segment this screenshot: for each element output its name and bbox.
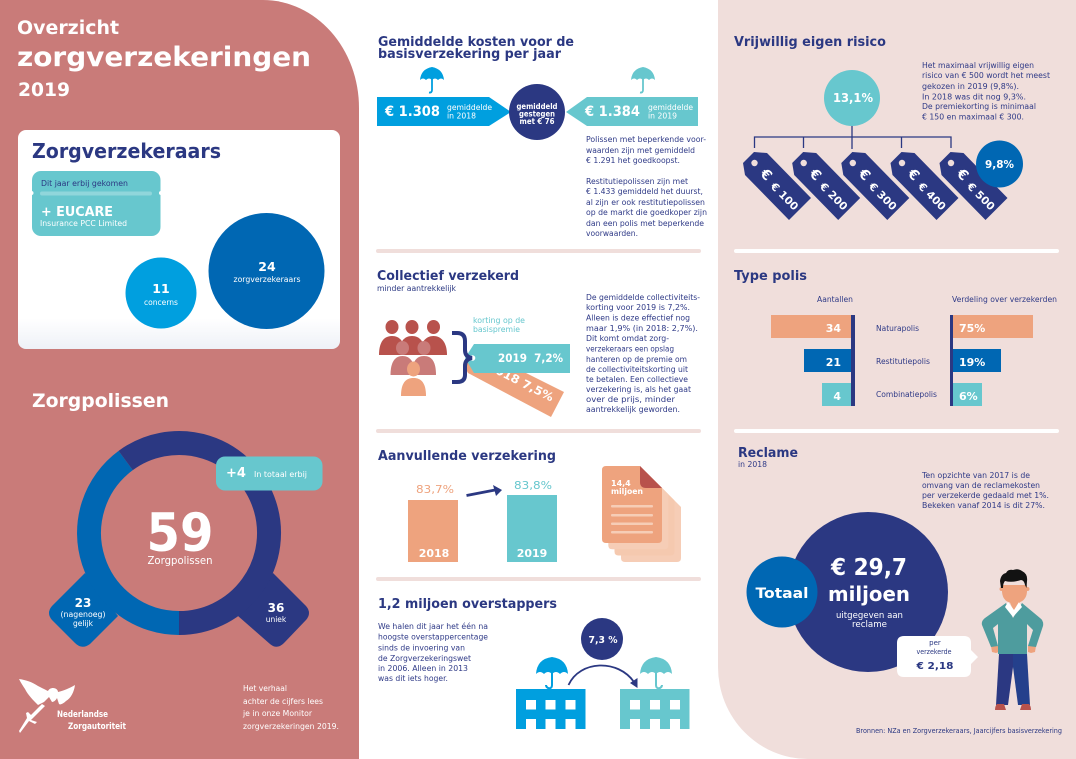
text: eigen risico: Het maximaal vrijwillig eigen [922,61,1034,70]
heading: gemiddelde kosten: Gemiddelde kosten voor de [378,35,574,50]
circle: gestegen met 76: met € 76 [520,117,554,126]
ring labels: uniek [266,615,287,624]
text: polissen: op de markt die goedkoper zijn [586,208,707,217]
panel: zorgverzekeraars [18,130,340,349]
heading: reclame [738,446,798,469]
tag: 400: € 400 [915,180,948,213]
text: collectiviteitskorting: aantrekkelijk geworden. [586,405,680,414]
arrow: 2018: gemiddelde [447,103,492,112]
bar: 2019: 2019 [517,547,547,560]
text: reclame: per verzekerde gedaald met 1%. [922,491,1049,500]
text: eigen risico: gekozen in 2019 (9,8%). [922,82,1019,91]
icon: documents 14,4 miljoen: miljoen [611,487,643,496]
text: overstappers: We halen dit jaar het één na [378,622,488,631]
column header: aantallen: Aantallen [817,295,853,304]
text: eigen risico: De premiekorting is minimaal [922,102,1036,111]
callout: per verzekerde: per [929,639,941,647]
tag: 300: € 300 [865,180,899,213]
title: Overzicht [17,18,119,39]
ring labels [60,596,287,628]
callout: +4 in totaal erbij: In totaal erbij [254,470,307,479]
arrow: 2018: in 2018 [447,112,476,120]
heading: collectief verzekerd: minder aantrekkelijk [377,284,456,293]
label: korting op de basispremie [473,316,525,334]
chart: verdeling bars: 75% [959,322,985,335]
text: monitor note: je in onze Monitor [242,709,313,718]
heading: collectief verzekerd [377,269,519,293]
tag: 200: € [805,165,824,184]
chart: aantallen bars: 34 [826,322,841,335]
icon: umbrella left [536,657,568,688]
tag: 300 [841,152,909,220]
callout: +4 in totaal erbij [216,456,322,490]
circle: 7,3% [581,618,623,660]
text: eigen risico: risico van € 500 wordt het meest [922,71,1050,80]
tag: 500: € [953,165,971,184]
tag: 2019 7,2% [465,344,570,373]
heading: vrijwillig eigen risico: Vrijwillig eigen risico [734,35,886,50]
logo: Nederlandse Zorgautoriteit [19,679,126,733]
title: 2019 [18,80,70,101]
circle: 29,7 miljoen: reclame [852,620,887,630]
text: polissen: Restitutiepolissen zijn met [586,177,688,186]
icon: group of people [379,320,447,396]
callout: per verzekerde: € 2,18 [915,661,954,672]
heading: reclame: Reclame [738,446,798,461]
text: collectiviteitskorting: maar 1,9% (in 2018: 2,7%). [586,324,698,333]
ticket: new insurer: + EUCARE [41,205,113,220]
circle: totaal [746,556,818,628]
callout: per verzekerde: verzekerde [916,648,952,656]
title: zorgverzekeringen [17,42,311,73]
icon: umbrella 2019 [631,67,655,93]
bar: 2018: 2018 [419,547,449,560]
section: type polis [734,269,1057,406]
text: eigen risico: € 150 en maximaal € 300. [922,112,1024,122]
bar: 2019: 83,8% [514,479,552,492]
text: overstappers [378,622,488,683]
panel: left background [0,0,359,759]
circle: totaal: Totaal [756,586,808,602]
text: polissen: al zijn er ook restitutiepolissen [586,198,705,207]
connector tree [754,126,951,149]
chart: verdeling bars: 6% [959,390,978,403]
text: collectiviteitskorting: over de prijs, minder [586,395,676,404]
chart: verdeling bars [950,315,1033,406]
tag: 2019 7,2%: 2019 7,2% [498,351,563,365]
circle: 7,3%: 7,3 % [588,635,618,646]
arrow: 2019 [566,97,698,126]
ring labels: 23 [75,596,91,610]
icon: person [982,569,1043,710]
arrow: switch insurer [568,665,638,688]
chart: aantallen bars: 21 [826,356,841,369]
section: overstappers [378,597,690,729]
text: polissen: dan een polis met beperkende [586,219,704,228]
ring labels: 36 [268,601,284,615]
arrow: increase [466,485,502,496]
circle: gestegen met 76: gemiddeld [516,102,558,111]
total: 59: 59 [146,503,214,564]
tag: 200 [792,152,860,220]
section: aanvullende verzekering [378,449,681,562]
tag: 2018 7,5% [463,355,564,417]
panel: right background [718,0,1076,759]
text: collectiviteitskorting: Dit komt omdat zorg- [586,334,669,343]
tag: 2018 7,5%: 2018 7,5% [486,359,557,405]
text: polissen: € 1.433 gemiddeld het duurst, [586,187,703,196]
text: polissen: voorwaarden. [586,229,638,238]
text: collectiviteitskorting: verzekeraars een opslag [586,344,674,354]
heading: reclame: in 2018 [738,460,767,469]
tag: 400 [890,152,958,220]
text: overstappers: was dit iets hoger. [378,674,448,683]
text: collectiviteitskorting: de collectiviteitskorting uit [586,365,688,374]
text: polissen [586,135,707,238]
tag: 100: € [756,165,775,184]
circle: gestegen met 76: gestegen [519,110,555,118]
heading: aanvullende verzekering: Aanvullende verzekering [378,449,556,464]
text: reclame: Ten opzichte van 2017 is de [921,471,1030,480]
ticket: new insurer: Insurance PCC Limited [40,219,127,228]
labels: polis types: Naturapolis [876,324,919,333]
tag: 100 [743,152,811,220]
text: overstappers: hoogste overstappercentage [378,632,488,642]
tag: 400: € [904,165,922,184]
icon: brace [452,333,472,382]
section: collectief verzekerd [377,269,700,417]
heading: zorgverzekeraars: Zorgverzekeraars [32,139,221,163]
circle: 11 concerns: concerns [144,298,178,307]
text: reclame: Bekeken vanaf 2014 is dit 27%. [922,501,1045,510]
text: collectiviteitskorting: te betalen. Een collectieve [586,375,688,384]
text: overstappers: sinds de invoering van [378,644,465,652]
icon: umbrella right [640,657,672,688]
circle: 9,8% [976,140,1023,188]
section: gemiddelde kosten [377,35,707,238]
text: monitor note: achter de cijfers lees [243,697,323,706]
circle: 29,7 miljoen: miljoen [828,582,910,606]
text: monitor note [242,684,339,731]
label: 36 uniek [238,573,309,647]
heading: type polis: Type polis [734,269,807,284]
arrow: 2018: € 1.308 [384,104,440,120]
circle: 24 zorgverzekeraars: zorgverzekeraars [234,275,301,284]
text: polissen: € 1.291 het goedkoopst. [586,156,680,165]
text: monitor note: Het verhaal [243,684,287,693]
labels: polis types: Combinatiepolis [876,390,937,399]
chart: aantallen bars: 4 [833,390,841,403]
circle: 13,1% [824,70,880,126]
icon: building right [620,689,690,729]
total: 59: Zorgpolissen [148,555,212,567]
text: polissen: waarden zijn met gemiddeld [586,146,695,155]
circle: 29,7 miljoen: uitgegeven aan [836,611,903,621]
text: collectiviteitskorting [586,293,700,414]
tag: 200: € 200 [816,180,850,213]
tag: 500 [940,152,1008,220]
circle: 9,8%: 9,8% [985,159,1014,171]
bar: 2018 [408,483,458,562]
labels: polis types [876,324,937,399]
chart: zorgpolissen donut [49,443,322,647]
callout: per verzekerde [897,636,978,677]
text: collectiviteitskorting: korting voor 2019 is 7,2%. [586,303,690,312]
heading: zorgpolissen: Zorgpolissen [32,390,169,412]
ticket: new insurer [30,171,163,236]
label: 23 nagenoeg gelijk [49,573,118,647]
arrow: 2019: gemiddelde [648,103,693,112]
heading: gemiddelde kosten [378,35,574,62]
ring labels: (nagenoeg) [60,610,106,619]
callout: +4 in totaal erbij: +4 [226,466,246,481]
arrow: 2019: in 2019 [648,112,677,120]
tag: 100: € 100 [767,180,800,213]
label: korting op de basispremie: korting op de [473,316,525,325]
icon: documents 14,4 miljoen: 14,4 [611,479,631,488]
tag: 300: € [854,165,873,184]
circle: 24 zorgverzekeraars [208,213,324,329]
label: korting op de basispremie: basispremie [473,325,520,334]
chart: verdeling bars: 19% [959,356,985,369]
text: overstappers: in 2006. Alleen in 2013 [378,664,468,673]
bar: 2019 [507,479,557,562]
text: eigen risico [922,61,1050,122]
chart: aantallen bars [771,315,855,406]
text: collectiviteitskorting: hanteren op de premie om [586,355,687,364]
heading: collectief verzekerd: Collectief verzekerd [377,269,519,284]
column header: verdeling: Verdeling over verzekerden [952,295,1057,304]
heading: gemiddelde kosten: basisverzekering per jaar [378,47,562,62]
section: reclame [738,446,1062,735]
text: monitor note: zorgverzekeringen 2019. [243,722,339,731]
text: eigen risico: In 2018 was dit nog 9,3%. [922,92,1026,102]
bar: 2018: 83,7% [416,483,454,496]
circle: 13,1%: 13,1% [833,91,873,105]
tag: 500: € 500 [964,180,997,213]
icon: umbrella 2018 [420,67,444,93]
circle: 29,7 miljoen: € 29,7 [830,555,907,581]
section: vrijwillig eigen risico [734,35,1050,220]
text: collectiviteitskorting: De gemiddelde collectiviteits- [586,293,700,302]
text: reclame [921,471,1049,510]
arrow: 2018 [377,97,511,126]
text: collectiviteitskorting: verzekering is, als het gaat [586,385,691,394]
logo: Nederlandse Zorgautoriteit: Nederlandse [57,709,108,720]
circle: 29,7 miljoen [788,512,948,672]
circle: 11 concerns [126,258,196,328]
logo: Nederlandse Zorgautoriteit: Zorgautoriteit [68,721,126,732]
labels: polis types: Restitutiepolis [876,357,930,366]
ring: 23 polissen [89,460,179,623]
icon: building left [516,689,586,729]
heading: overstappers: 1,2 miljoen overstappers [378,597,557,612]
text: polissen: Polissen met beperkende voor- [586,135,706,144]
circle: 11 concerns: 11 [152,281,170,296]
circle: 24 zorgverzekeraars: 24 [258,259,276,274]
text: reclame: omvang van de reclamekosten [922,481,1040,490]
text: collectiviteitskorting: Alleen is deze effectief nog [586,314,690,322]
title [17,18,311,101]
ticket: new insurer: Dit jaar erbij gekomen [41,179,128,188]
text: overstappers: de Zorgverzekeringswet [378,654,471,663]
arrow: 2019: € 1.384 [584,104,640,120]
ring labels: gelijk [73,619,94,628]
circle: gestegen met 76 [509,84,565,140]
ring: 36 polissen [126,443,269,623]
icon: documents 14,4 miljoen [602,466,681,562]
